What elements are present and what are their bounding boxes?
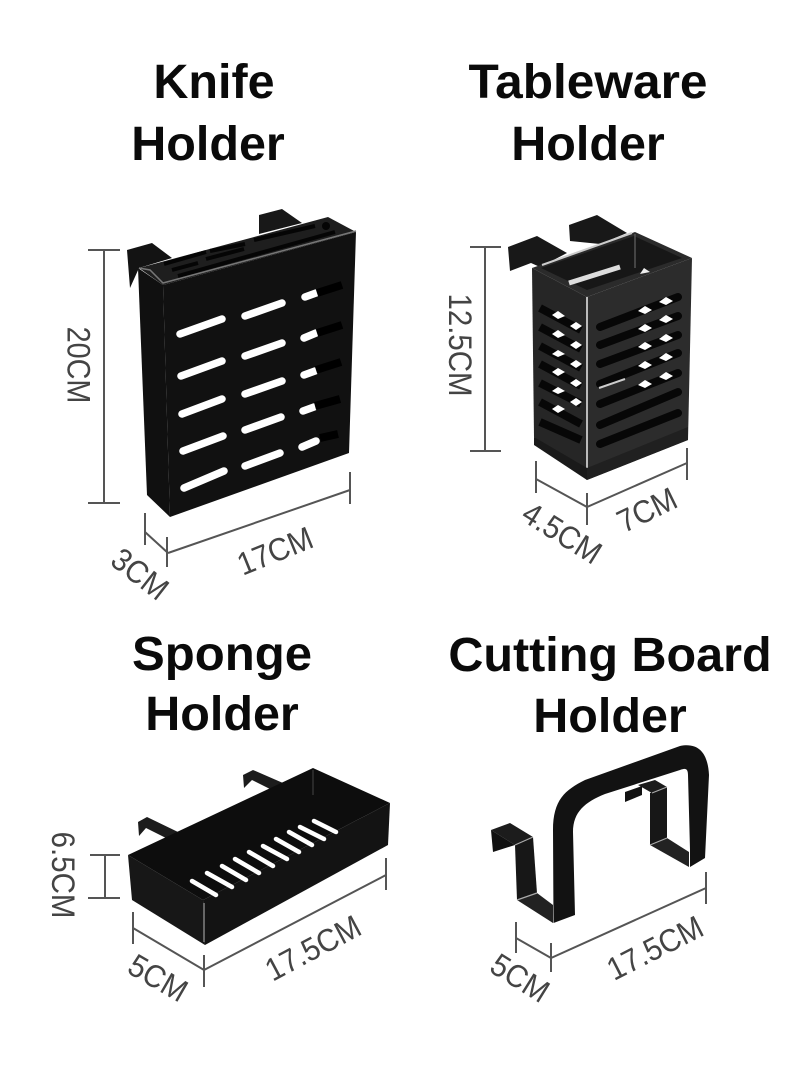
dimensions: sponge holder: 6.5CM — [45, 832, 81, 918]
heading: Cutting Board Holder: Holder — [533, 689, 687, 743]
dimensions: cutting board holder — [484, 872, 709, 1010]
panel: sponge holder illustration — [128, 768, 390, 945]
dimensions: tableware holder: 7CM — [611, 480, 683, 540]
dimensions: sponge holder: 5CM — [122, 947, 194, 1009]
dimensions: knife holder: 20CM — [60, 327, 96, 403]
dimensions: cutting board holder: 17.5CM — [601, 908, 709, 988]
heading: Knife Holder: Knife — [153, 55, 275, 109]
heading: Cutting Board Holder: Cutting Board — [448, 628, 772, 682]
heading: Tableware Holder — [468, 55, 708, 171]
dimensions: knife holder — [60, 250, 350, 607]
dimensions: tableware holder — [442, 247, 687, 571]
panel: tableware holder illustration — [508, 215, 692, 480]
panel: cutting board holder illustration — [491, 745, 709, 923]
heading: Sponge Holder: Holder — [145, 687, 299, 741]
heading: Tableware Holder: Tableware — [468, 55, 708, 109]
dimensions: tableware holder: 12.5CM — [442, 293, 478, 397]
heading: Cutting Board Holder — [448, 628, 772, 743]
heading: Knife Holder — [131, 55, 285, 171]
heading: Sponge Holder: Sponge — [132, 627, 312, 681]
heading: Tableware Holder: Holder — [511, 117, 665, 171]
heading: Knife Holder: Holder — [131, 117, 285, 171]
dimensions: tableware holder: 4.5CM — [516, 495, 608, 571]
dimensions: sponge holder: 17.5CM — [259, 908, 367, 988]
heading: Sponge Holder — [132, 627, 312, 741]
dimensions: knife holder: 3CM — [104, 541, 176, 607]
dimensions: sponge holder — [45, 832, 386, 1009]
dimensions: cutting board holder: 5CM — [484, 946, 556, 1010]
dimensions: knife holder: 17CM — [232, 519, 318, 583]
panel: knife holder illustration — [127, 209, 356, 517]
